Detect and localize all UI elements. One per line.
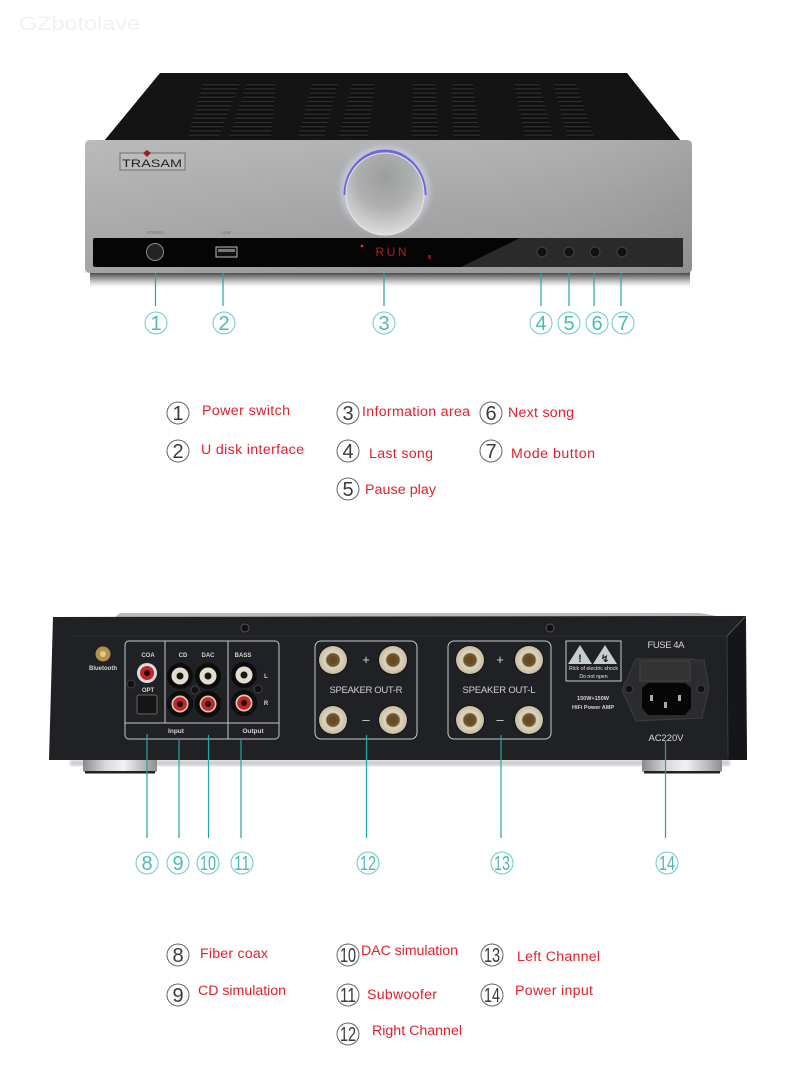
- fuse label: FUSE 4A: [648, 640, 685, 651]
- rear teal number markers: 12: [360, 853, 376, 875]
- input and output connector box: DAC: [202, 653, 215, 659]
- front teal number markers: 2: [218, 313, 230, 335]
- legend labels 8-14: [198, 943, 600, 1039]
- legend markers 8-14: 9: [172, 985, 184, 1007]
- LED display: RUN: [376, 245, 406, 259]
- legend labels 1-7: Mode button: [511, 446, 595, 462]
- rear teal number markers: 10: [200, 853, 216, 875]
- warning label: ↯: [601, 654, 609, 665]
- legend markers 8-14: 14: [484, 985, 500, 1007]
- left foot: [83, 758, 157, 774]
- legend markers 8-14: 13: [484, 945, 500, 967]
- speaker out L panel: [448, 641, 551, 739]
- front teal number markers: 7: [617, 313, 629, 335]
- legend labels 1-7: [201, 403, 595, 498]
- legend markers 1-7: 5: [342, 479, 354, 501]
- legend labels 8-14: DAC simulation: [361, 943, 458, 959]
- input and output connector box: Input: [168, 728, 185, 735]
- legend labels 1-7: Information area: [362, 404, 470, 420]
- legend markers 8-14: [167, 944, 503, 1046]
- front panel drop shadow: [90, 271, 690, 287]
- power rating text: HiFi Power AMP: [572, 705, 614, 711]
- USB port: USB: [221, 230, 231, 235]
- speaker out L panel: –: [496, 712, 504, 727]
- legend markers 1-7: 6: [485, 403, 497, 425]
- legend markers 8-14: 8: [172, 945, 184, 967]
- front teal number markers: 4: [535, 313, 547, 335]
- function buttons: [537, 247, 627, 257]
- legend labels 1-7: Power switch: [202, 403, 290, 419]
- AC voltage label: AC220V: [648, 733, 684, 744]
- rear teal number markers: 13: [494, 853, 510, 875]
- CD and DAC jacks: [167, 663, 221, 717]
- power rating text: 150W+150W: [577, 696, 610, 702]
- bass output jacks: [231, 662, 262, 716]
- rear chassis: [49, 616, 747, 760]
- USB port: [216, 230, 237, 257]
- legend markers 8-14: 11: [340, 985, 356, 1007]
- front teal number markers: 6: [591, 313, 603, 335]
- power button: POWER: [146, 230, 164, 235]
- power button: [146, 230, 164, 260]
- front teal number markers: 1: [150, 313, 162, 335]
- warning label: !: [578, 653, 582, 665]
- legend labels 8-14: Fiber coax: [200, 946, 268, 962]
- legend labels 1-7: Last song: [369, 446, 433, 462]
- bluetooth antenna connector: Bluetooth: [89, 666, 117, 672]
- legend labels 1-7: Next song: [508, 405, 574, 421]
- legend labels 1-7: Pause play: [365, 482, 437, 498]
- LED display: [361, 245, 431, 259]
- legend labels 8-14: Subwoofer: [367, 987, 437, 1003]
- front amplifier photo: [85, 73, 692, 287]
- volume knob with blue ring: [340, 146, 430, 235]
- rear teal number markers: 11: [234, 853, 250, 875]
- legend markers 1-7: 4: [342, 441, 354, 463]
- legend markers 8-14: 12: [340, 1024, 356, 1046]
- input and output connector box: COA: [141, 653, 155, 659]
- speaker out R panel: [315, 641, 417, 739]
- amplifier top cover: [104, 73, 681, 141]
- power rating text: [572, 696, 614, 711]
- input and output connector box: BASS: [235, 653, 251, 659]
- front teal number markers: 3: [378, 313, 390, 335]
- warning label: Do not open: [579, 674, 608, 680]
- input and output connector box: [125, 641, 279, 739]
- speaker out R panel: SPEAKER OUT-R: [330, 685, 403, 696]
- brand badge: TRASAM: [122, 158, 182, 170]
- legend labels 8-14: Left Channel: [517, 949, 600, 965]
- speaker out R panel: –: [362, 712, 370, 727]
- legend markers 8-14: 10: [340, 945, 356, 967]
- silver faceplate: [85, 140, 692, 273]
- watermark: GZbotolave: [19, 14, 140, 35]
- front callout lines: [156, 273, 621, 306]
- legend markers 1-7: 1: [172, 403, 184, 425]
- front teal number markers: 5: [563, 313, 575, 335]
- power inlet: [622, 659, 709, 721]
- speaker out L panel: SPEAKER OUT-L: [462, 685, 536, 696]
- rear shadow: [70, 760, 730, 766]
- rear teal number markers: 8: [141, 853, 153, 875]
- warning label: Rick of electric shock: [569, 666, 618, 672]
- legend markers 1-7: 7: [485, 441, 497, 463]
- rear callout lines: [147, 734, 666, 838]
- rear teal number markers: [136, 852, 678, 875]
- front teal number markers: [145, 312, 634, 335]
- legend labels 8-14: Power input: [515, 983, 593, 999]
- legend markers 1-7: 3: [342, 403, 354, 425]
- legend labels 8-14: Right Channel: [372, 1023, 462, 1039]
- rear legend: [167, 943, 600, 1046]
- front legend: [167, 402, 595, 501]
- top edge strip: [115, 613, 722, 617]
- input and output connector box: OPT: [142, 688, 154, 694]
- warning label: [566, 641, 621, 681]
- legend labels 8-14: CD simulation: [198, 983, 286, 999]
- rear teal number markers: 9: [172, 853, 184, 875]
- bluetooth antenna connector: [89, 646, 117, 672]
- rear teal number markers: 14: [659, 853, 675, 875]
- rear amplifier photo: [49, 613, 747, 774]
- legend labels 1-7: U disk interface: [201, 442, 304, 458]
- coaxial and optical ports: [127, 663, 157, 714]
- brand badge: [120, 150, 185, 170]
- legend markers 1-7: 2: [172, 441, 184, 463]
- input and output connector box: R: [264, 701, 269, 707]
- input and output connector box: L: [264, 674, 268, 680]
- speaker out R panel: +: [362, 652, 370, 667]
- input and output connector box: Output: [242, 728, 264, 735]
- speaker out L panel: +: [496, 652, 504, 667]
- black control strip: [93, 238, 683, 267]
- input and output connector box: CD: [179, 653, 188, 659]
- legend markers 1-7: [167, 402, 502, 501]
- right foot: [642, 758, 722, 774]
